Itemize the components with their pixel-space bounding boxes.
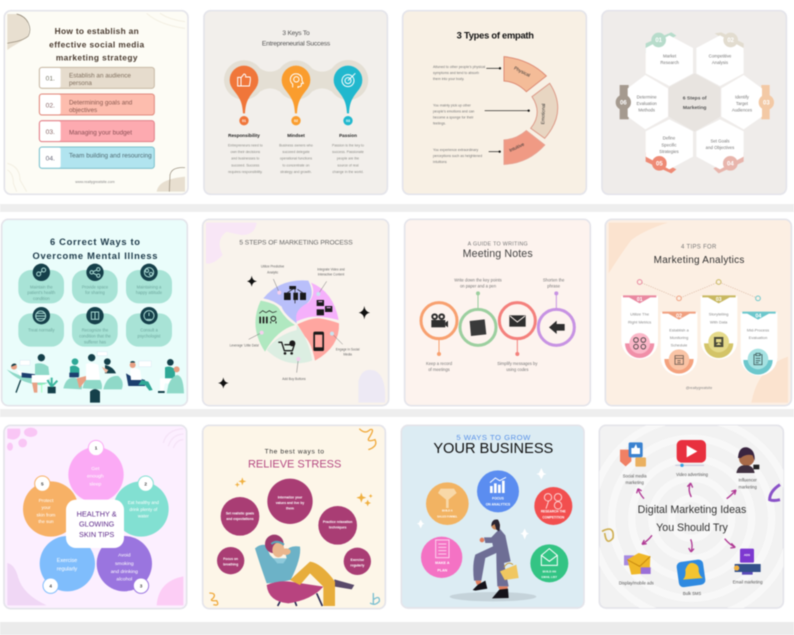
circle: plan: PLAN bbox=[437, 568, 448, 572]
heading: How to establish an bbox=[55, 26, 139, 36]
segment labels with leaders: Utilize Predictive bbox=[261, 265, 285, 269]
heading: Digital Marketing Ideas bbox=[638, 504, 746, 516]
circle: email: EMAIL LIST bbox=[541, 575, 557, 579]
bubble labels: Focus on bbox=[223, 557, 238, 561]
tip card 04: 04 bbox=[755, 313, 761, 319]
heading: 5 STEPS OF MARKETING PROCESS bbox=[239, 239, 353, 246]
icon: email marketing: ADS bbox=[744, 553, 750, 557]
step labels: Write down the key points bbox=[454, 277, 502, 282]
panel: relieve stress bbox=[203, 425, 385, 609]
item 02 bbox=[39, 94, 154, 115]
heading: 3 Keys To bbox=[282, 30, 310, 37]
tip card 02: Schedule bbox=[671, 342, 688, 347]
panel: 5 ways to grow your business: YOUR BUSINESS bbox=[433, 441, 554, 457]
description: emotional: become a sponge for their bbox=[433, 116, 474, 120]
labels: Email marketing bbox=[733, 580, 763, 585]
item 01: Establish an audience bbox=[69, 73, 131, 80]
step labels: Analysis bbox=[712, 60, 728, 65]
bubble labels: Internalize your bbox=[278, 495, 303, 499]
circle: sales funnel: SALES FUNNEL bbox=[437, 515, 458, 519]
sparkles bbox=[218, 276, 370, 389]
circle: email bbox=[530, 544, 568, 582]
petal labels: and drinking bbox=[111, 569, 138, 575]
pie segments bbox=[255, 280, 339, 363]
column: mindset: succeed delegate bbox=[282, 150, 310, 154]
step badges: 06 bbox=[620, 100, 627, 106]
description: physical bbox=[433, 65, 501, 81]
segment labels with leaders: Interactive Content bbox=[318, 273, 344, 277]
column: passion: Passion bbox=[339, 133, 357, 138]
tiles bbox=[18, 270, 172, 347]
bubble labels: and expectations bbox=[226, 517, 254, 521]
labels bbox=[619, 472, 763, 596]
tile labels: psychologist bbox=[138, 334, 161, 339]
column: mindset: Mindset bbox=[287, 133, 305, 138]
bubble labels: breathing bbox=[223, 562, 238, 566]
labels: Bulk SMS bbox=[683, 591, 701, 596]
column: mindset bbox=[279, 133, 313, 174]
step labels: Research bbox=[660, 60, 680, 65]
item 01: persona bbox=[69, 80, 92, 87]
illustration: relaxing person bbox=[255, 535, 354, 606]
step labels: Specific bbox=[661, 142, 677, 147]
column: passion: people are the bbox=[337, 157, 359, 161]
tip card 01: Right Metrics bbox=[628, 319, 651, 324]
segment labels with leaders bbox=[230, 265, 360, 381]
description: emotional: feelings. bbox=[433, 122, 446, 126]
item 01: 01. bbox=[46, 76, 55, 83]
circle: analytics bbox=[477, 470, 519, 512]
petal labels: the sun bbox=[38, 519, 54, 524]
step labels: and Objectives bbox=[706, 145, 734, 150]
labels: marketing bbox=[739, 484, 757, 489]
tile labels: patient's health bbox=[27, 290, 56, 295]
number badges: 4 bbox=[49, 583, 52, 588]
heading: 4 TIPS FOR bbox=[681, 245, 717, 251]
number badges bbox=[35, 440, 153, 593]
column: passion: change in the world. bbox=[332, 170, 364, 174]
petal labels: alcohol bbox=[116, 577, 132, 583]
column: responsibility: Entrepreneurs need to bbox=[228, 143, 263, 147]
icon: arrow bbox=[549, 321, 565, 334]
icon: email marketing bbox=[734, 549, 761, 575]
pin: mindset: 02 bbox=[294, 119, 298, 123]
icon: influencer bbox=[736, 447, 759, 473]
tile labels: for sharing bbox=[85, 290, 106, 295]
panel: 5 ways to grow your business bbox=[401, 425, 584, 608]
connector dots bbox=[637, 280, 760, 301]
step labels: Target bbox=[736, 101, 749, 106]
panel: relieve stress: RELIEVE STRESS bbox=[248, 458, 341, 470]
heading: 3 Types of empath bbox=[457, 30, 534, 40]
segment: intuitive bbox=[504, 131, 545, 164]
bubbles bbox=[217, 479, 371, 575]
item 01 bbox=[39, 67, 154, 88]
circle: analytics: ON ANALYTICS bbox=[486, 503, 511, 507]
tab bands bbox=[620, 32, 770, 173]
panel: 6 steps of marketing bbox=[602, 11, 786, 194]
pin: passion bbox=[334, 66, 362, 125]
icon: bulk sms bbox=[676, 559, 706, 588]
column: passion bbox=[332, 133, 364, 174]
centre card: HEALTHY & bbox=[77, 509, 117, 518]
item 03: 03. bbox=[46, 129, 55, 136]
step labels: phrase bbox=[547, 283, 561, 288]
labels: Video advertising bbox=[676, 472, 709, 477]
icon: video camera bbox=[431, 313, 448, 327]
arrows bbox=[637, 483, 736, 552]
rings bbox=[421, 303, 574, 345]
step badges: 05 bbox=[656, 161, 663, 167]
number badges: 3 bbox=[140, 583, 143, 588]
tile labels: condition bbox=[33, 296, 50, 301]
item 03 bbox=[39, 121, 154, 142]
tile labels: condition that the bbox=[79, 334, 112, 339]
bubble labels: values and live by bbox=[276, 501, 304, 505]
labels: Influencer bbox=[739, 478, 757, 483]
panel: 3 keys to entrepreneurial success bbox=[204, 11, 387, 194]
heading: The best ways to bbox=[265, 449, 324, 456]
tip card 04: Mid-Process bbox=[747, 327, 769, 332]
column: passion: Passion is the key to bbox=[332, 143, 364, 147]
step labels: Keep a record bbox=[426, 361, 453, 366]
step labels: Strategies bbox=[659, 149, 679, 154]
curl decorations bbox=[602, 485, 780, 541]
tile labels bbox=[27, 284, 163, 344]
segment: physical bbox=[504, 57, 546, 92]
circle: research: RESEARCH THE bbox=[541, 510, 566, 514]
heading: marketing strategy bbox=[56, 53, 138, 63]
circle: research bbox=[534, 487, 572, 525]
illustration: businesswoman bbox=[450, 520, 536, 601]
bubble labels: Exercise bbox=[350, 558, 364, 562]
tile icons bbox=[33, 264, 158, 324]
centre title: 6 Steps of bbox=[683, 96, 707, 102]
tile labels: Provide space bbox=[82, 284, 109, 289]
hexagons bbox=[628, 35, 762, 169]
description: intuitive bbox=[433, 148, 501, 164]
item 04: Team building and resourcing bbox=[69, 152, 152, 159]
step labels bbox=[426, 277, 565, 372]
petal labels: regularly bbox=[57, 566, 78, 572]
heading: You Should Try bbox=[656, 522, 729, 534]
column: mindset: strategy and growth. bbox=[280, 170, 312, 174]
icon: envelope bbox=[509, 315, 526, 327]
tip card 03: With Data bbox=[710, 319, 728, 324]
tile labels: happy attitude bbox=[136, 290, 163, 295]
petal labels: enough bbox=[87, 474, 104, 480]
item 04: 04. bbox=[46, 155, 55, 162]
number badges: 5 bbox=[41, 481, 44, 486]
item 02: objectives bbox=[69, 107, 97, 114]
step badges: 04 bbox=[727, 161, 734, 167]
item 04 bbox=[39, 147, 154, 168]
description: intuitive: You experience extraordinary bbox=[433, 148, 478, 152]
description: intuitive: intuitions bbox=[433, 160, 447, 164]
column: responsibility: Responsibility bbox=[228, 133, 260, 138]
step labels: using codes bbox=[506, 367, 528, 372]
bubble labels: techniques bbox=[329, 526, 347, 530]
step labels: Identify bbox=[735, 94, 750, 99]
step badges: 01 bbox=[655, 38, 663, 44]
handle: @reallygreatsite bbox=[686, 386, 712, 390]
labels: marketing bbox=[626, 480, 644, 485]
illustration: group session bbox=[63, 352, 123, 403]
item 02: Determining goals and bbox=[69, 100, 133, 107]
description: emotional bbox=[433, 104, 530, 126]
petal labels: sleep bbox=[89, 482, 102, 488]
sparkles bbox=[417, 468, 546, 539]
description: emotional: You mainly pick up other bbox=[433, 104, 472, 108]
step labels: Simplify messages by bbox=[497, 361, 538, 366]
panel: 6 correct ways to overcome mental illness bbox=[2, 219, 187, 406]
description: physical: them into your body. bbox=[433, 77, 464, 81]
tip card 02: Monitoring bbox=[670, 335, 688, 340]
tip card 03: Storytelling bbox=[709, 311, 729, 316]
connector band bbox=[224, 60, 368, 100]
heading: Overcome Mental Illness bbox=[32, 251, 157, 261]
heading: effective social media bbox=[49, 39, 145, 49]
petal labels bbox=[37, 466, 159, 583]
bubble labels bbox=[223, 495, 365, 567]
petal labels: Exercise bbox=[57, 558, 77, 564]
tip card 04 bbox=[741, 312, 777, 376]
icon: notepad bbox=[470, 319, 486, 336]
bubble labels: them bbox=[286, 507, 294, 511]
tip card 02: Establish a bbox=[669, 327, 690, 332]
column: responsibility: requires responsibility. bbox=[228, 170, 263, 174]
petal labels: Get bbox=[91, 466, 100, 472]
column: responsibility: and businesses to bbox=[231, 157, 259, 161]
segment labels with leaders: Integrate Video and bbox=[317, 267, 345, 271]
segment icons bbox=[259, 286, 332, 355]
segment: physical: Physical bbox=[513, 65, 531, 78]
illustration: counselling pair bbox=[126, 359, 184, 393]
footer: www.reallygreatsite.com bbox=[75, 180, 115, 184]
petal labels: Avoid bbox=[118, 553, 131, 559]
description: emotional: people's emotions and can bbox=[433, 110, 474, 114]
icon: display ads bbox=[624, 553, 651, 575]
tile labels: Consult a bbox=[140, 328, 158, 333]
tile labels: Treat normally bbox=[28, 328, 55, 333]
centre title: Marketing bbox=[683, 105, 706, 111]
tip card 01 bbox=[621, 295, 658, 359]
centre card: SKIN TIPS bbox=[79, 530, 114, 539]
illustration: therapy session bbox=[7, 354, 57, 393]
column: mindset: Business owners who bbox=[279, 143, 313, 147]
number badges: 1 bbox=[95, 446, 98, 451]
petal labels: drink plenty of bbox=[129, 507, 158, 512]
bubble labels: Practice relaxation bbox=[323, 520, 352, 524]
description: intuitive: perceptions such as heightened bbox=[433, 154, 482, 158]
column: mindset: to concentrate on bbox=[283, 163, 310, 167]
panel: 3 types of empath bbox=[403, 11, 586, 194]
petal labels: smoking bbox=[115, 561, 134, 567]
step labels: of meetings bbox=[428, 367, 450, 372]
heading: Entrepreneurial Success bbox=[262, 41, 331, 48]
column: mindset: operational functions bbox=[280, 157, 312, 161]
step badges bbox=[616, 33, 774, 171]
circle: research: COMPETITION bbox=[542, 516, 565, 520]
icon: social media bbox=[620, 442, 646, 467]
segment labels with leaders: Add Buy Buttons bbox=[282, 377, 306, 381]
circle: sales funnel: BUILD A bbox=[442, 509, 453, 513]
tip card 01: 01 bbox=[637, 297, 643, 303]
panel: meeting notes guide bbox=[405, 219, 590, 406]
segment: emotional: Emotional bbox=[540, 104, 546, 124]
sparkles bbox=[235, 477, 373, 506]
column: responsibility: succeed. Success bbox=[231, 163, 260, 167]
panel: social media marketing strategy bbox=[4, 11, 188, 194]
heading: A GUIDE TO WRITING bbox=[468, 242, 528, 248]
step labels: Define bbox=[663, 136, 676, 141]
step labels: Audiences bbox=[732, 107, 752, 112]
tip card 04: Evaluation bbox=[749, 335, 767, 340]
tip card 03: 03 bbox=[716, 297, 722, 303]
step labels: Market bbox=[663, 54, 677, 59]
icon: video bbox=[675, 440, 706, 467]
segment labels with leaders: Analytic bbox=[267, 270, 279, 274]
panel: healthy and glowing skin tips bbox=[4, 425, 187, 609]
circle: sales funnel bbox=[426, 482, 469, 525]
number badges: 2 bbox=[144, 481, 147, 486]
petal labels: Eat healthy and bbox=[128, 500, 159, 505]
pin: passion: 03 bbox=[346, 119, 350, 123]
tip card 02: 02 bbox=[676, 313, 682, 319]
circle: plan bbox=[421, 537, 462, 578]
panel: 4 tips for marketing analytics bbox=[605, 219, 791, 406]
heading: 5 WAYS TO GROW bbox=[456, 433, 531, 442]
labels: Social media bbox=[623, 474, 647, 479]
tile labels: Maintain the bbox=[30, 284, 53, 289]
centre card: GLOWING bbox=[79, 520, 115, 529]
circle: email: BUILD AN bbox=[543, 569, 556, 573]
circle: plan: MAKE A bbox=[435, 561, 450, 565]
step labels: Competitive bbox=[709, 54, 732, 59]
step labels: on paper and a pen bbox=[460, 283, 497, 288]
centre card bbox=[66, 500, 124, 548]
panel: digital marketing ideas bbox=[598, 424, 784, 609]
pin: mindset bbox=[282, 66, 310, 125]
pin: responsibility bbox=[230, 66, 258, 125]
column: passion: success. Passionate bbox=[332, 150, 364, 154]
segment labels with leaders: Media bbox=[343, 353, 352, 357]
petal labels: your bbox=[41, 505, 51, 510]
column: responsibility bbox=[228, 133, 263, 174]
panel: 4 tips for marketing analytics: Marketing Analytics bbox=[654, 255, 744, 266]
description: physical: symptoms and tend to absorb bbox=[433, 71, 479, 75]
column: responsibility: own their decisions bbox=[231, 150, 260, 154]
segment labels with leaders: Engage in Social bbox=[336, 347, 360, 351]
bubble labels: regularly bbox=[350, 563, 365, 567]
labels: Display/mobile ads bbox=[619, 581, 654, 586]
circle: analytics: FOCUS bbox=[492, 497, 505, 501]
step labels: Methods bbox=[638, 107, 655, 112]
segment labels with leaders: Leverage 'Little Data' bbox=[230, 344, 259, 348]
tip card 03 bbox=[701, 295, 737, 359]
heading: 6 Correct Ways to bbox=[50, 237, 140, 247]
tip card 02 bbox=[661, 312, 697, 376]
pin: responsibility: 01 bbox=[242, 119, 246, 123]
tile labels: Recognize the bbox=[82, 328, 109, 333]
petal labels: Protect bbox=[39, 498, 54, 503]
item 03: Managing your budget bbox=[69, 129, 132, 136]
leaders bbox=[437, 291, 558, 356]
petal labels: skin from bbox=[37, 512, 56, 517]
tip card 01: Utilize The bbox=[630, 311, 650, 316]
tile labels: sufferer has bbox=[84, 339, 106, 344]
bubble labels: Set realistic goals bbox=[226, 511, 254, 515]
step badges: 02 bbox=[727, 38, 735, 44]
step badges: 03 bbox=[763, 100, 770, 106]
step labels: Evaluation bbox=[637, 101, 657, 106]
segment: intuitive: Intuitive bbox=[508, 141, 525, 153]
step labels: Shorten the bbox=[543, 277, 565, 282]
tile labels: Maintaining a bbox=[137, 284, 162, 289]
segment: emotional bbox=[531, 83, 558, 138]
panel: 5 steps of marketing process bbox=[203, 219, 389, 406]
step labels: Set Goals bbox=[710, 139, 730, 144]
panel: meeting notes guide: Meeting Notes bbox=[463, 248, 533, 260]
item 02: 02. bbox=[46, 102, 55, 109]
petals bbox=[23, 447, 169, 591]
petal labels: water bbox=[138, 514, 149, 519]
column: passion: source of real bbox=[337, 163, 359, 167]
doodles bbox=[209, 429, 379, 605]
step labels: Determine bbox=[637, 94, 657, 99]
description: physical: Attuned to other people's physical bbox=[433, 65, 485, 69]
step labels bbox=[637, 54, 752, 154]
